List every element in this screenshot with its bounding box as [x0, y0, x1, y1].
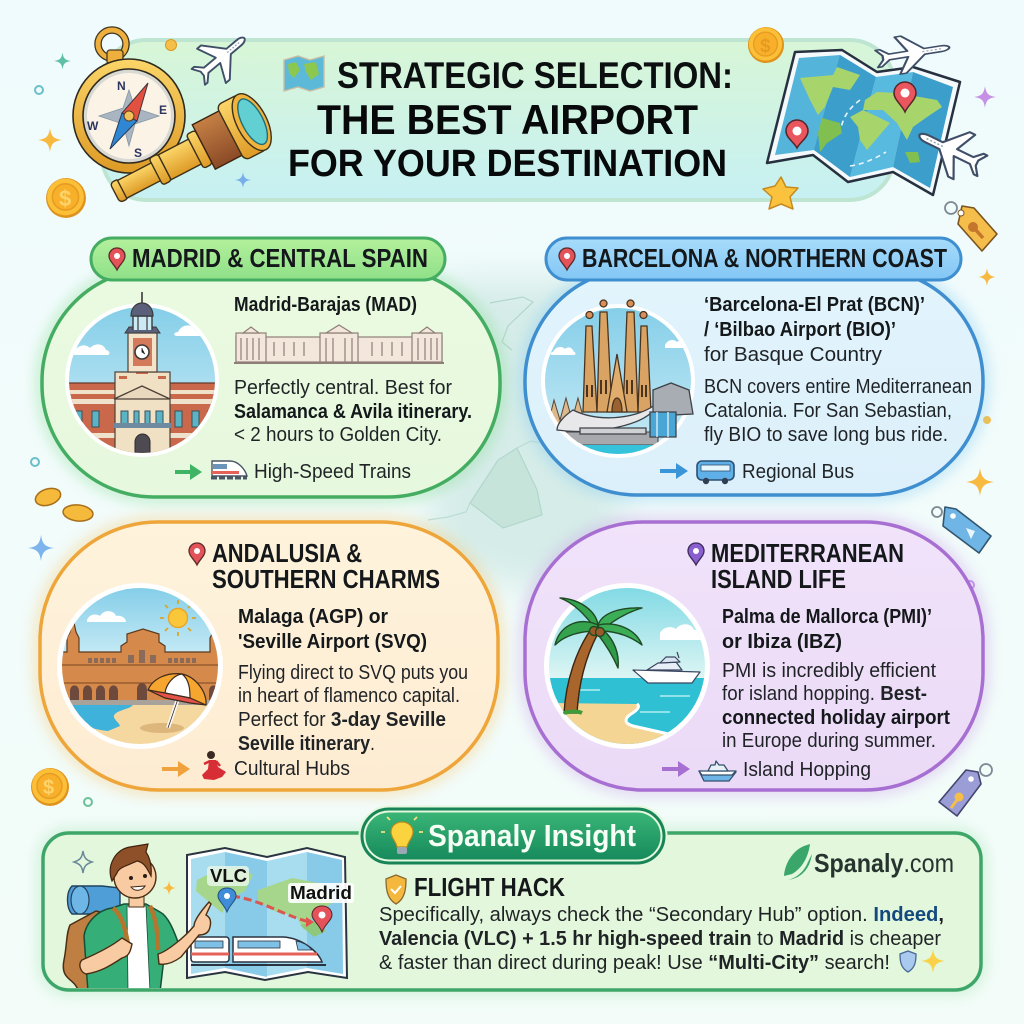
- arrow: Barcelona: [660, 463, 688, 479]
- panel: Spanaly Insight: [43, 809, 981, 992]
- tower top poking out of the circle: [131, 292, 153, 330]
- icon: train: [211, 461, 247, 478]
- text: island airports: Palma de Mallorca (PMI)’: [722, 606, 932, 628]
- text: Madrid airport: Madrid-Barajas (MAD): [234, 294, 417, 316]
- icon: Sagrada Familia spires: [583, 300, 651, 412]
- icon: coin top: $: [760, 36, 771, 57]
- icon: red pin: [894, 82, 916, 112]
- text: Barcelona description: BCN covers entire Mediterranean: [704, 376, 972, 398]
- image: Seville scene: [57, 583, 228, 755]
- icon: coin left: $: [59, 186, 71, 211]
- icon: coin top: [748, 27, 784, 63]
- decorative sparkles: [28, 40, 996, 806]
- image: island scene: [544, 583, 710, 755]
- text: Andalusia description: [238, 662, 468, 755]
- image: Madrid scene: [60, 292, 226, 462]
- arrow: Madrid: [175, 464, 202, 480]
- heading: Madrid: [91, 238, 445, 280]
- title: [288, 55, 733, 185]
- icon: compass: S: [134, 146, 142, 160]
- image: Barcelona scene: [540, 300, 700, 470]
- icon: beach umbrella: [148, 674, 206, 728]
- icon: ferry: [699, 761, 736, 781]
- image: traveler with map: [63, 844, 354, 992]
- icon: bus: [697, 461, 734, 484]
- icon: coin lower left: $: [43, 777, 54, 799]
- text: flight hack body: Valencia (VLC) + 1.5 hr high-speed train to Madrid is cheaper: [379, 928, 941, 950]
- title: STRATEGIC SELECTION:: [337, 55, 733, 96]
- text: Madrid description: < 2 hours to Golden City.: [234, 424, 442, 446]
- text: island airports: [722, 606, 932, 653]
- panel: Andalusia & Southern Charms: [40, 522, 498, 790]
- faint Spain map backdrop: [428, 280, 620, 590]
- label: Cultural Hubs: Cultural Hubs: [234, 758, 350, 780]
- text: flight hack body: [379, 904, 944, 974]
- text: Andalusia airports: [238, 606, 427, 653]
- icon: plane over map top: [874, 29, 952, 77]
- icon: compass: [73, 30, 185, 173]
- text: island description: [722, 660, 950, 752]
- heading: Mediterranean: MEDITERRANEAN: [711, 538, 904, 568]
- header banner: [102, 40, 894, 200]
- text: Andalusia description: Seville itinerary.: [238, 733, 375, 755]
- text: Barcelona airports: [704, 294, 925, 366]
- icon: shield: [386, 875, 406, 904]
- text: Andalusia airports: Malaga (AGP) or: [238, 606, 388, 628]
- heading: Madrid: MADRID & CENTRAL SPAIN: [132, 243, 428, 273]
- icon: map with route: [187, 848, 354, 980]
- text: Barcelona airports: ‘Barcelona-El Prat (BCN)’: [704, 294, 925, 316]
- heading: Mediterranean: [688, 538, 904, 594]
- heading: Mediterranean: ISLAND LIFE: [711, 564, 846, 594]
- text: island description: for island hopping. Best-: [722, 683, 927, 705]
- heading pill: Spanaly Insight: [362, 809, 664, 863]
- text: Barcelona description: Catalonia. For San Sebastian,: [704, 400, 952, 422]
- icon: gold price tag: [945, 202, 997, 251]
- icon: plane top left: [184, 21, 259, 94]
- icon: compass: E: [159, 103, 167, 117]
- heading: Andalusia: [189, 538, 440, 594]
- heading pill: Spanaly Insight: Spanaly Insight: [428, 818, 636, 853]
- heading: Andalusia: ANDALUSIA &: [212, 538, 362, 568]
- text: Barcelona airports: for Basque Country: [704, 344, 882, 366]
- icon: backpacker: [63, 844, 211, 992]
- text: island description: in Europe during summer.: [722, 730, 936, 752]
- icon: world map right: [767, 50, 960, 195]
- text: island description: connected holiday airport: [722, 707, 950, 729]
- icon: palace line drawing: [234, 325, 444, 363]
- text: flight hack body: Specifically, always check the “Secondary Hub” option. Indeed,: [379, 904, 944, 926]
- heading: Barcelona: BARCELONA & NORTHERN COAST: [582, 243, 947, 273]
- icon: plane over map bottom: [909, 113, 993, 188]
- text: Andalusia description: Flying direct to SVQ puts you: [238, 662, 468, 684]
- text: Madrid description: Salamanca & Avila itinerary.: [234, 401, 472, 423]
- icon: Guggenheim curves: [557, 383, 693, 437]
- icon: flamenco dancer: [202, 751, 226, 780]
- icon: palm tree: [555, 598, 642, 713]
- icon: blue price tag: [932, 507, 991, 553]
- title: THE BEST AIRPORT: [317, 96, 698, 143]
- label: Island Hopping: Island Hopping: [743, 759, 871, 781]
- heading: Flight Hack: FLIGHT HACK: [414, 872, 565, 902]
- text: Andalusia airports: 'Seville Airport (SVQ): [238, 631, 427, 653]
- icon: lightbulb: [381, 817, 423, 854]
- text: Madrid description: Perfectly central. Best for: [234, 377, 452, 399]
- icon: high-speed train: [191, 937, 326, 965]
- logo: Spanaly.com: Spanaly.com: [814, 848, 954, 878]
- label: High-Speed Trains: High-Speed Trains: [254, 461, 411, 483]
- icon: red pin: [786, 120, 808, 148]
- icon: loose coins left: [33, 485, 94, 523]
- icon: yellow sparkles: [921, 949, 945, 973]
- icon: purple price tag: [939, 764, 992, 816]
- text: Barcelona description: fly BIO to save long bus ride.: [704, 424, 948, 446]
- text: Barcelona description: [704, 376, 972, 446]
- icon: map with route: Madrid: [290, 883, 352, 903]
- icon: small blue shield: [900, 951, 916, 972]
- panel: Madrid & Central Spain: [42, 238, 500, 497]
- heading: Barcelona: [546, 238, 961, 280]
- icon: world map emoji: [284, 56, 324, 91]
- icon: spyglass: [101, 88, 279, 221]
- panel: Mediterranean Island Life: [525, 522, 983, 790]
- label: Regional Bus: Regional Bus: [742, 461, 854, 483]
- text: flight hack body: & faster than direct during peak! Use “Multi-City” search!: [379, 952, 890, 974]
- text: Madrid description: [234, 377, 472, 446]
- text: Andalusia description: in heart of flamenco capital.: [238, 685, 460, 707]
- arrow: Andalusia: [162, 761, 190, 777]
- heading: Andalusia: SOUTHERN CHARMS: [212, 564, 440, 594]
- icon: coin lower left: [31, 768, 69, 806]
- title: FOR YOUR DESTINATION: [288, 143, 727, 185]
- icon: gold star: [763, 177, 798, 209]
- text: island airports: or Ibiza (IBZ): [722, 631, 842, 653]
- icon: gold sparkle: [162, 881, 176, 895]
- arrow: island: [662, 761, 690, 777]
- text: Andalusia description: Perfect for 3-day Seville: [238, 709, 446, 731]
- text: Barcelona airports: / ‘Bilbao Airport (BIO)’: [704, 319, 896, 341]
- text: island description: PMI is incredibly efficient: [722, 660, 936, 682]
- icon: compass: W: [87, 119, 99, 133]
- icon: sparkle outline: [74, 851, 92, 873]
- icon: compass: N: [117, 79, 126, 93]
- panel: Barcelona & Northern Coast: [525, 238, 983, 495]
- icon: map with route: VLC: [210, 866, 247, 886]
- logo: Spanaly.com: [784, 844, 954, 880]
- icon: yacht: [633, 652, 700, 683]
- icon: coin left: [46, 178, 86, 218]
